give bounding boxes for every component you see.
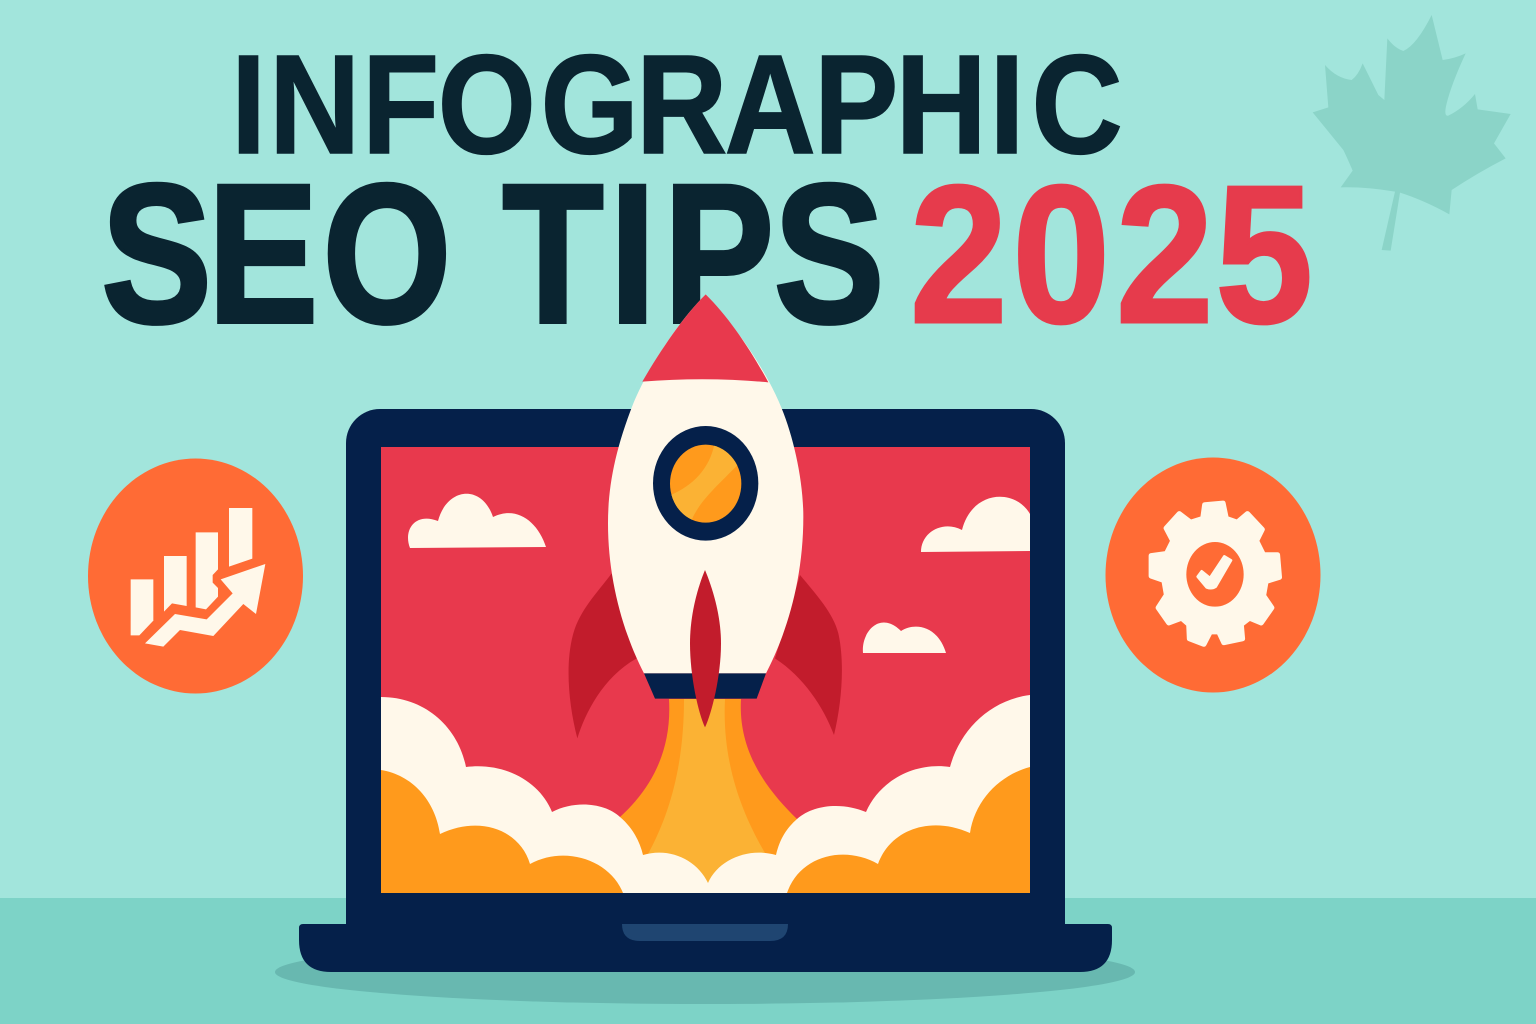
engine band: [644, 673, 766, 699]
porthole ring: [653, 426, 758, 541]
cloud right: [921, 497, 1030, 552]
laptop screen: [381, 447, 1030, 893]
nose cone: [642, 294, 768, 382]
laptop: [275, 409, 1135, 1004]
smoke cloud cream: [381, 695, 1030, 893]
cloud left: [408, 494, 546, 548]
title line: SEO TIPS: SEO TIPS: [101, 143, 884, 364]
ground band: [0, 898, 1536, 1024]
cloud small: [863, 623, 946, 653]
title year: 2025: 2025: [910, 146, 1313, 364]
porthole highlight: [672, 446, 738, 520]
trackpad notch: [622, 924, 788, 941]
rocket body: [608, 294, 803, 673]
laptop shadow: [275, 940, 1135, 1004]
smoke cloud orange right: [787, 767, 1030, 893]
icon: maple leaf watermark: [1313, 15, 1511, 251]
center fin: [690, 570, 721, 727]
badge: settings gear: [1106, 458, 1320, 692]
porthole glass: [670, 445, 741, 523]
badge circle: [88, 458, 303, 694]
screen sky: [381, 447, 1030, 893]
badge: growth chart: [88, 458, 303, 694]
rocket: [569, 294, 842, 738]
rocket exhaust flame: [620, 699, 797, 890]
icon: gear with check mark: [1151, 503, 1279, 644]
laptop lid: [346, 409, 1065, 960]
smoke cloud orange left: [381, 770, 623, 893]
title line: INFOGRAPHIC: INFOGRAPHIC: [231, 27, 1123, 184]
badge circle: [1106, 458, 1320, 692]
right fin: [775, 575, 842, 735]
left fin: [569, 573, 637, 738]
laptop base: [299, 924, 1112, 972]
icon: rising bars and arrow: [131, 508, 265, 647]
